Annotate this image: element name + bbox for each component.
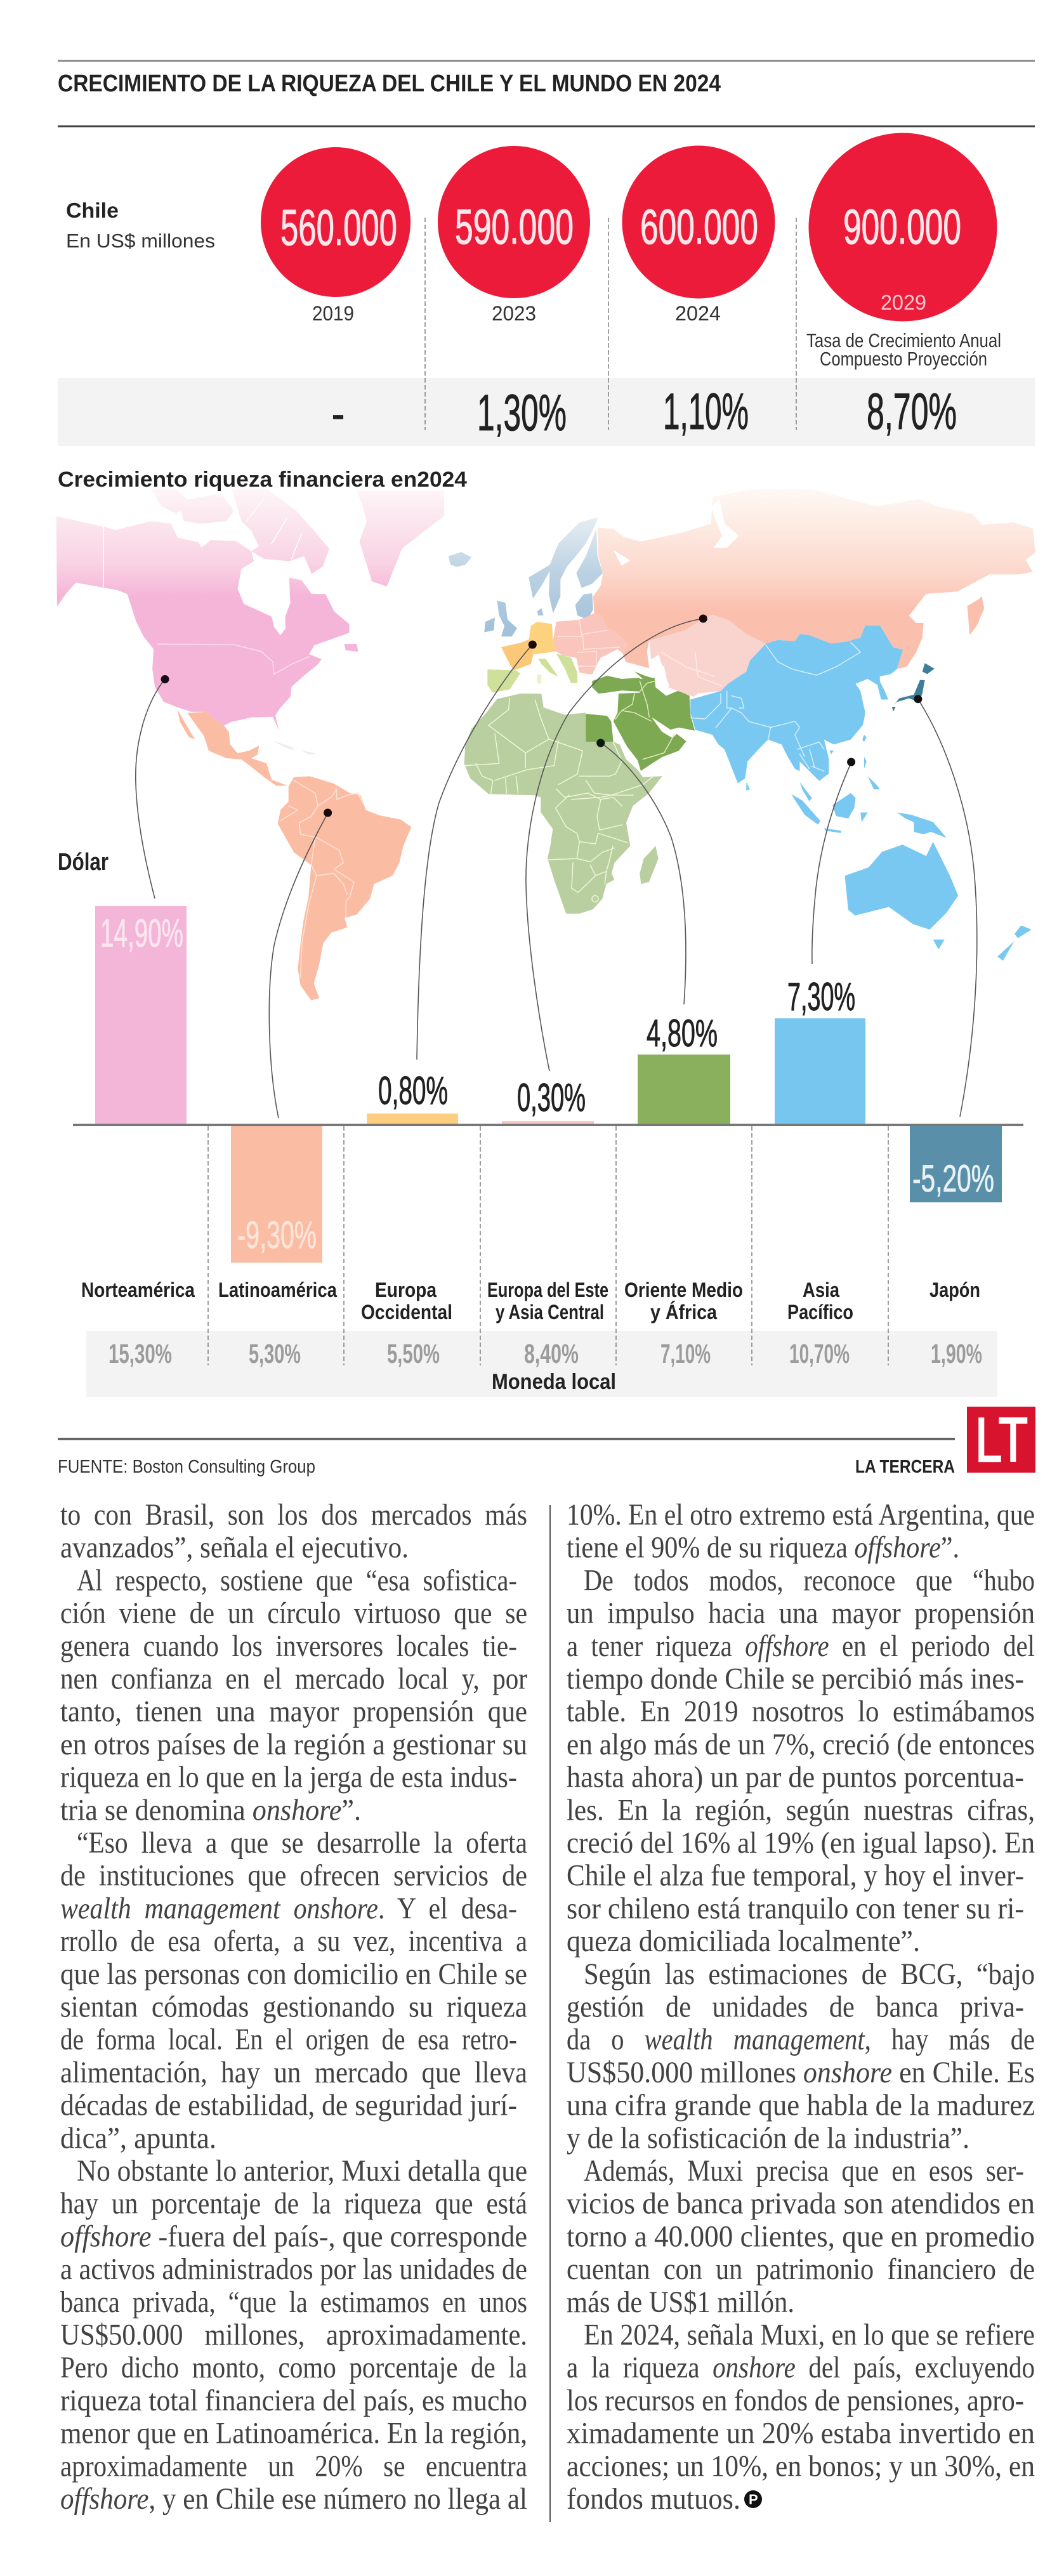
bar: Europa Occidental (367, 1069, 458, 1125)
title: CRECIMIENTO DE LA RIQUEZA DEL CHILE Y EL MUNDO EN 2024 (58, 70, 721, 97)
region labels: Occidental (361, 1301, 452, 1324)
article column 1: offshore -fuera del país-, que corresponde (60, 2219, 527, 2253)
region labels: Pacífico (787, 1301, 853, 1324)
Southern Europe (487, 654, 577, 693)
circle 2019 (261, 147, 410, 325)
region labels: y Asia Central (496, 1301, 604, 1324)
bar chart (73, 906, 1023, 1397)
local currency values (108, 1339, 982, 1369)
article column 1: tanto, tienen una mayor propensión que (60, 1695, 527, 1728)
Kazakhstan and Central Asia (649, 615, 766, 700)
credit: LA TERCERA (855, 1457, 955, 1477)
circle 2029: 2029 (881, 291, 926, 314)
percent values: 8,70% (867, 383, 957, 440)
article column 2: da o wealth management, hay más de (567, 2023, 1035, 2056)
region labels: Norteamérica (81, 1278, 195, 1301)
circle 2023 (438, 146, 590, 325)
article column 1: aproximadamente un 20% se encuentra (60, 2449, 527, 2483)
article column 1: nen confianza en el mercado local y, por (60, 1662, 527, 1695)
region: Mexico and Central America (178, 709, 288, 786)
percent values: 1,10% (663, 383, 749, 440)
local currency values: 10,70% (789, 1339, 850, 1369)
bar: Japón: -5,20% (912, 1157, 994, 1200)
article column 1: décadas de estabilidad, de seguridad jurí- (60, 2089, 517, 2122)
region labels: Europa (375, 1278, 437, 1301)
China, India and mainland Asia (690, 626, 903, 784)
icon: end mark P: P (749, 2492, 758, 2507)
article column 1: a activos administrados por las unidades de (60, 2252, 527, 2286)
circle 2023: 2023 (492, 302, 536, 325)
article column 2: US$50.000 millones onshore en Chile. Es (567, 2056, 1035, 2089)
article column 1: hay un porcentaje de la riqueza que está (60, 2187, 527, 2221)
bar: Norteamérica (95, 906, 187, 1125)
Germany and France (529, 622, 556, 655)
article column 1: que las personas con domicilio en Chile se (60, 1957, 527, 1991)
article column 1: Al respecto, sostiene que “esa sofistica- (77, 1563, 517, 1597)
circle 2019: 2019 (312, 302, 354, 325)
icon: end mark P (744, 2490, 762, 2508)
panel: world map (56, 489, 1035, 1001)
source: FUENTE: Boston Consulting Group (58, 1457, 315, 1477)
heading: map: Crecimiento riqueza financiera en2024 (58, 468, 467, 492)
local currency values: 1,90% (931, 1339, 982, 1369)
article column 1: riqueza total financiera del país, es mucho (60, 2384, 527, 2417)
region: North America (56, 489, 444, 786)
article column 1: “Eso lleva a que se desarrolle la oferta (77, 1826, 527, 1860)
circle 2023: 590.000 (455, 199, 574, 254)
Chile label (66, 199, 215, 252)
growth rate note: Compuesto Proyección (820, 348, 987, 370)
local currency values: 7,10% (660, 1339, 711, 1369)
article column 1: dica”, apunta. (60, 2121, 216, 2155)
region: Europe, Middle East and Africa (449, 517, 695, 914)
local currency band (86, 1331, 997, 1397)
region labels: Latinoamérica (218, 1278, 337, 1301)
article column 2: a la riqueza onshore del país, excluyendo (567, 2351, 1035, 2384)
article column 1: US$50.000 millones, aproximadamente. (60, 2318, 527, 2351)
article column 1: de instituciones que ofrecen servicios de (60, 1859, 527, 1893)
bar: Norteamérica: 14,90% (100, 912, 183, 956)
callout lines (136, 614, 977, 1118)
Africa (464, 693, 662, 914)
circle 2029: 900.000 (843, 199, 961, 254)
region labels: Japón (929, 1278, 980, 1301)
article column 1: Pero dicho monto, como porcentaje de la (60, 2351, 527, 2384)
percent values: - (331, 385, 345, 442)
Islands of Southeast Asia (746, 735, 947, 838)
region labels: Europa del Este (487, 1278, 608, 1301)
region: Russia and Asia (593, 489, 1035, 838)
local currency values: 5,50% (387, 1339, 440, 1369)
Japan (892, 663, 935, 712)
local currency values: 5,30% (249, 1339, 301, 1369)
bar: Latinoamérica (231, 1126, 322, 1263)
article column 2: hasta ahora) un par de puntos porcentua- (567, 1761, 1024, 1794)
bar: Europa del Este y Asia Central: 0,30% (517, 1076, 586, 1120)
article column 1: No obstante lo anterior, Muxi detalla que (77, 2154, 527, 2188)
Western Europe north (449, 517, 603, 636)
logo: LT: LT (975, 1405, 1028, 1475)
region labels: y África (650, 1301, 717, 1324)
article column 2: vicios de banca privada son atendidos en (567, 2187, 1035, 2221)
article column 2: torno a 40.000 clientes, que en promedio (567, 2219, 1035, 2253)
circle 2024 (622, 146, 775, 325)
article column 1: alimentación, hay un mercado que lleva (60, 2056, 527, 2089)
article column 1: menor que en Latinoamérica. En la región, (60, 2417, 527, 2450)
Eastern Europe (553, 614, 628, 674)
bar: Asia Pacífico (775, 975, 865, 1125)
region labels: Oriente Medio (624, 1278, 743, 1301)
label: Dólar: Dólar (58, 849, 108, 876)
article column 1: sientan cómodas gestionando su riqueza (60, 1990, 527, 2024)
region: Oceania (845, 842, 1032, 961)
panel: Chile wealth circles (58, 133, 1035, 446)
bar: Oriente Medio y África: 4,80% (647, 1012, 718, 1055)
article column 2: más de US$1 millón. (567, 2285, 794, 2319)
Chile label: En US$ millones (66, 230, 215, 252)
article column 1: en otros países de la región a gestionar su (60, 1728, 527, 1761)
article column 2: tiene el 90% de su riqueza offshore”. (567, 1531, 959, 1565)
article column 1: de forma local. En el origen de esa retro- (60, 2023, 517, 2056)
article column 2 (567, 1498, 1035, 2516)
article column 1: tria se denomina onshore”. (60, 1793, 361, 1827)
region: South America (278, 776, 411, 1001)
bar: Latinoamérica: -9,30% (237, 1214, 317, 1256)
bar: Oriente Medio y África (638, 1012, 730, 1125)
region labels (81, 1278, 980, 1324)
bar: Asia Pacífico: 7,30% (787, 975, 855, 1019)
article column 1: offshore, y en Chile ese número no llega al (60, 2482, 527, 2516)
Chile label: Chile (66, 199, 119, 222)
percent values: 1,30% (477, 384, 567, 442)
article column 1 (60, 1498, 527, 2516)
article column 2: fondos mutuos. (567, 2482, 740, 2516)
bar: Japón (910, 1126, 1002, 1202)
article column 1: banca privada, “que la estimamos en unos (60, 2285, 527, 2319)
article column 2: a tener riqueza offshore en el periodo del (567, 1629, 1035, 1663)
circle 2024: 2024 (675, 302, 721, 325)
region labels: Asia (803, 1278, 839, 1301)
bar: Europa Occidental: 0,80% (378, 1069, 448, 1113)
Russia (593, 489, 1035, 669)
circle 2019: 560.000 (280, 199, 397, 256)
article column 1: to con Brasil, son los dos mercados más (60, 1498, 527, 1532)
article column 1: wealth management onshore. Y el desa- (60, 1891, 517, 1925)
region: Greenland (357, 490, 444, 586)
article column 2: ximadamente un 20% estaba invertido en (567, 2417, 1035, 2450)
article column 1: rrollo de esa oferta, a su vez, incentiva a (60, 1924, 527, 1958)
local currency values: 8,40% (524, 1339, 579, 1369)
article column 1: riqueza en lo que en la jerga de esta indus- (60, 1761, 517, 1794)
article column 1: ción viene de un círculo virtuoso que se (60, 1596, 527, 1630)
bar: Europa del Este y Asia Central (502, 1076, 594, 1125)
Middle East (586, 671, 695, 771)
article column 2: sor chileno está tranquilo con tener su ri- (567, 1891, 1024, 1925)
label: Moneda local: Moneda local (492, 1370, 616, 1394)
circle 2029 (808, 133, 997, 321)
local currency values: 15,30% (108, 1339, 172, 1369)
circle 2024: 600.000 (640, 199, 758, 254)
article column 2: y de la sofisticación de la industria”. (567, 2121, 969, 2155)
article column 2: una cifra grande que habla de la madurez (567, 2089, 1035, 2122)
percent band (58, 378, 1035, 446)
article column 1: avanzados”, señala el ejecutivo. (60, 1531, 409, 1565)
article column 2: tiempo donde Chile se percibió más ines- (567, 1662, 1024, 1695)
growth rate note: Tasa de Crecimiento Anual (806, 329, 1001, 352)
article column 1: genera cuando los inversores locales tie- (60, 1629, 517, 1663)
article column 2: queza domiciliada localmente”. (567, 1924, 920, 1958)
percent values (331, 383, 957, 442)
growth rate note (806, 329, 1001, 370)
article column 2: Chile el alza fue temporal, y hoy el inver- (567, 1859, 1024, 1893)
